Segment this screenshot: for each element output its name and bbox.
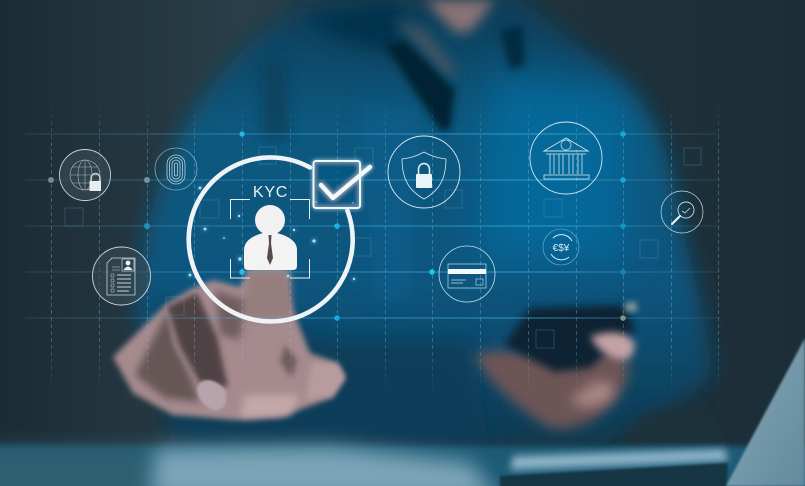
grid node dots bbox=[48, 131, 626, 321]
icon: glowing check box bbox=[314, 161, 370, 208]
face scan brackets bbox=[230, 200, 310, 278]
icon: bank building bbox=[530, 122, 602, 194]
icon: magnifier with check bbox=[661, 191, 703, 233]
icon: credit card bbox=[439, 246, 495, 302]
KYC label: KYC bbox=[253, 184, 288, 201]
icon: fingerprint bbox=[155, 148, 197, 190]
businessman torso in blue shirt bbox=[137, 0, 725, 450]
grid lines bbox=[25, 100, 720, 400]
shirt shaded folds bbox=[300, 0, 400, 55]
icon: resume document bbox=[92, 247, 150, 305]
icon: person with tie bbox=[244, 205, 297, 270]
smartphone and holding hand bbox=[474, 302, 637, 429]
icon: globe with padlock bbox=[60, 150, 110, 200]
blurred desk bbox=[0, 446, 805, 486]
icon: shield with padlock bbox=[388, 136, 460, 208]
pointing hand bbox=[113, 268, 345, 420]
icon: currency exchange: €$¥ bbox=[553, 243, 570, 254]
icon: currency exchange bbox=[543, 229, 579, 265]
neck skin bbox=[425, 0, 495, 32]
KYC main ring bbox=[189, 157, 353, 321]
laptop corner bbox=[726, 338, 805, 486]
dark collar and placket bbox=[385, 40, 455, 130]
